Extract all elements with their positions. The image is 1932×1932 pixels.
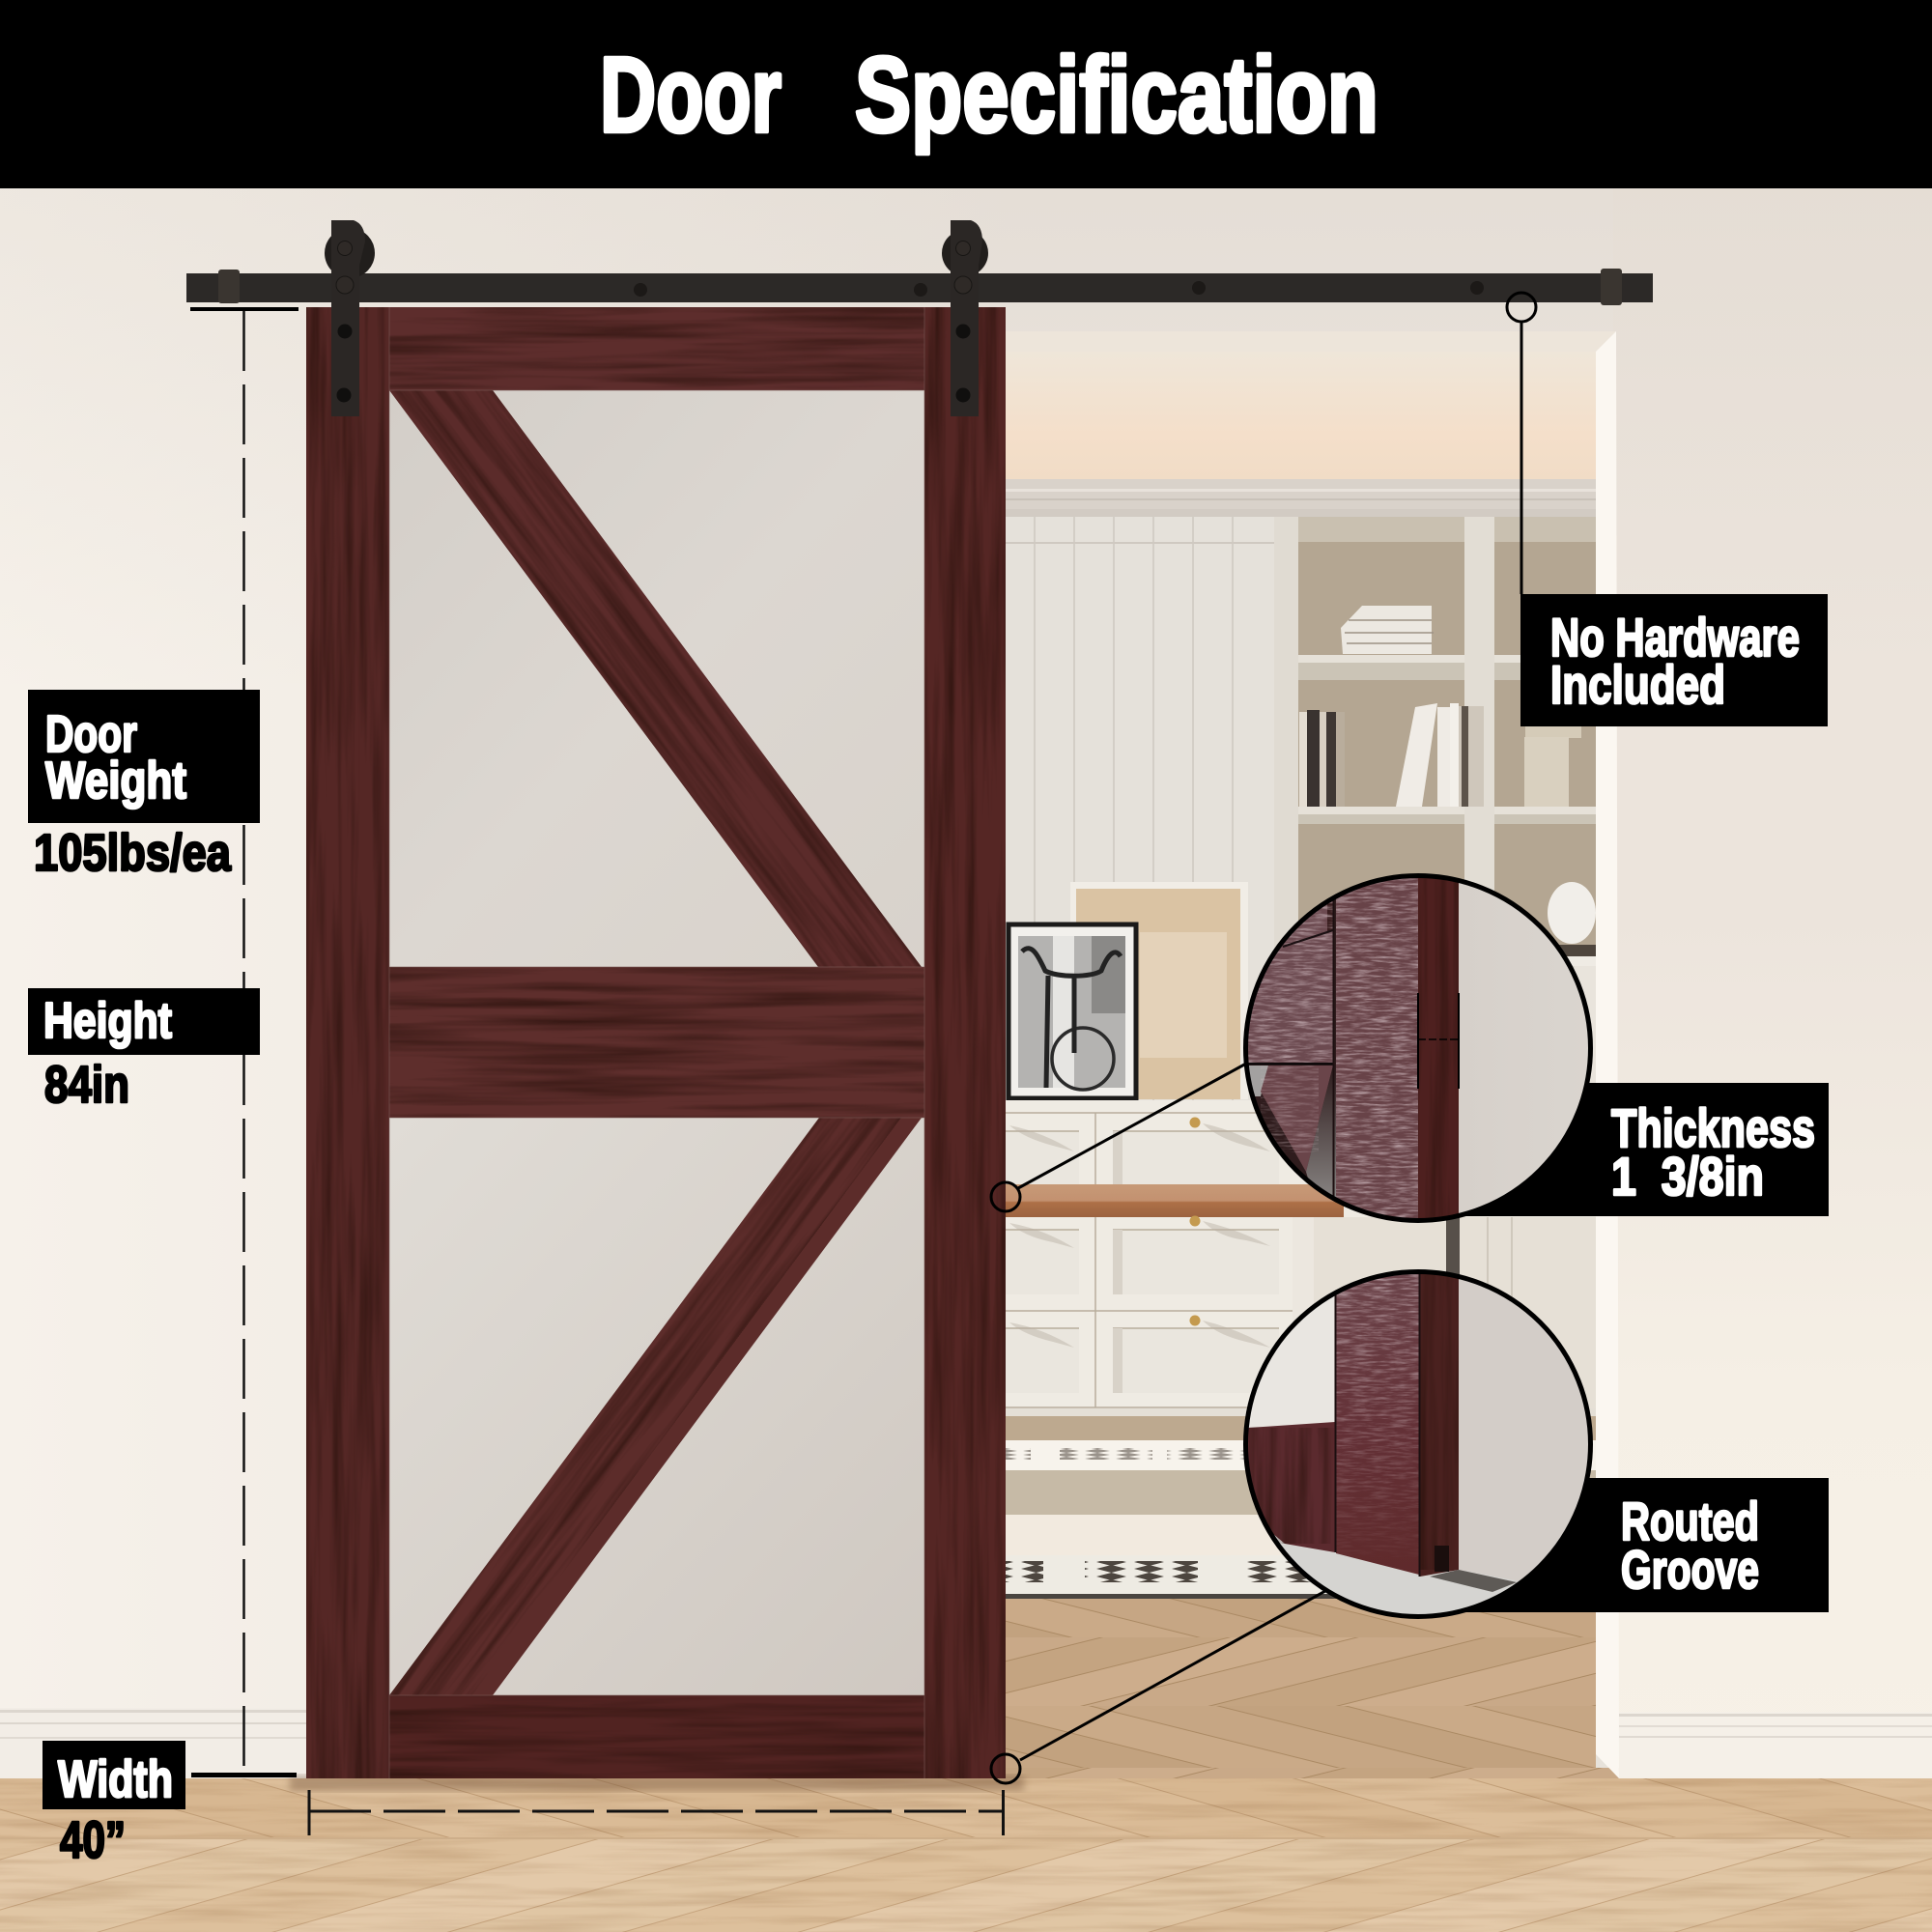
right hanger [942,220,988,416]
title: Specification [855,36,1378,155]
label: door weight: Door [45,705,137,763]
label: height [28,988,260,1114]
callout: no hardware included: Included [1550,654,1725,715]
bookcase [1274,517,1596,1116]
title [600,36,1378,155]
room floor and rug [1006,1408,1619,1781]
cabinets and wood shelf [1006,1100,1596,1416]
header bar [0,0,1932,188]
right stile [924,307,1006,1778]
glass panels [388,389,925,1697]
left hanger [325,220,375,416]
callout: thickness [1449,1083,1829,1216]
label: height: 84in [44,1056,129,1114]
callout: thickness: Thickness [1611,1097,1815,1158]
door [306,307,1006,1778]
knob shadows [1009,1123,1270,1348]
rail stops [218,269,1622,305]
callout: routed groove [1449,1478,1829,1612]
magnifier: routed groove detail [1241,1267,1599,1625]
callout: no hardware included [1507,293,1828,726]
label: door weight [28,690,260,882]
label: door weight: 105lbs/ea [34,824,232,882]
label: width: 40” [60,1811,126,1869]
width dimension line [307,1790,1005,1835]
left stile [306,307,389,1778]
magnifier: door thickness detail [1241,869,1599,1227]
callout: routed groove: Groove [1621,1539,1759,1600]
upper diagonal brace [389,390,922,967]
height dimension line [190,307,298,1777]
barn door rail hardware [186,220,1653,416]
middle rail [389,967,924,1118]
callout: routed groove: Routed [1621,1491,1759,1551]
background room through doorway [1006,331,1619,1781]
leader lines to door details [991,1064,1325,1783]
bottom rail [389,1695,924,1778]
top rail [389,307,924,390]
wood floor [0,1776,1932,1932]
callout: thickness: 1 3/8in [1611,1146,1764,1207]
title: Door [600,36,781,155]
label: width [43,1741,185,1869]
label: height: Height [43,993,172,1049]
framed art [1009,882,1248,1099]
label: width: Width [58,1750,173,1808]
callout: no hardware included: No Hardware [1550,607,1800,668]
lower diagonal brace [389,1118,922,1695]
label: door weight: Weight [45,752,186,810]
books and decor on shelves [1299,606,1596,956]
